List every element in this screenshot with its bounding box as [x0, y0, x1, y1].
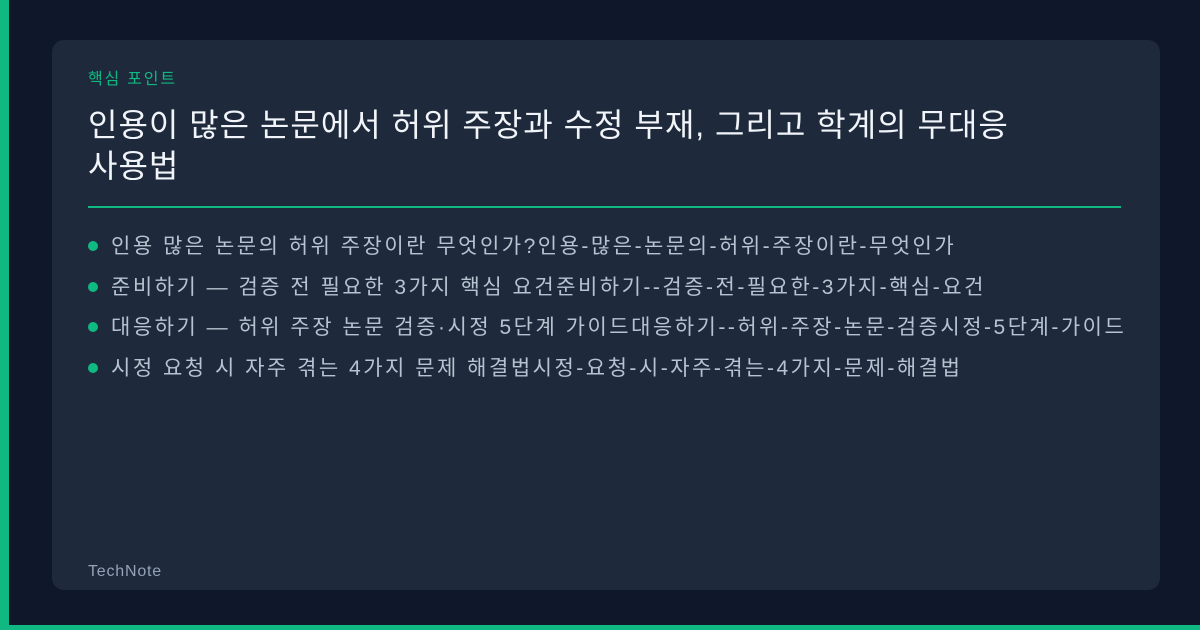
- left accent bar: [0, 0, 9, 630]
- bullet list: [88, 235, 1126, 380]
- title: 인용이 많은 논문에서 허위 주장과 수정 부재, 그리고 학계의 무대응: [88, 107, 1009, 143]
- brand footer: TechNote: [88, 563, 162, 580]
- bottom accent bar: [0, 625, 1200, 630]
- bullet 2: 준비하기 — 검증 전 필요한 3가지 핵심 요건준비하기--검증-전-필요한-3가지-핵심-요건: [111, 276, 986, 298]
- bullet 4: 시정 요청 시 자주 겪는 4가지 문제 해결법시정-요청-시-자주-겪는-4가지-문제-해결법: [111, 356, 962, 380]
- bullet 1: 인용 많은 논문의 허위 주장이란 무엇인가?인용-많은-논문의-허위-주장이란-무엇인가: [111, 235, 956, 258]
- bullet 3: 대응하기 — 허위 주장 논문 검증·시정 5단계 가이드대응하기--허위-주장-논문-검증시정-5단계-가이드: [111, 316, 1126, 339]
- kicker label: 핵심 포인트: [88, 71, 177, 88]
- title: [88, 107, 1009, 184]
- title: 사용법: [88, 148, 179, 184]
